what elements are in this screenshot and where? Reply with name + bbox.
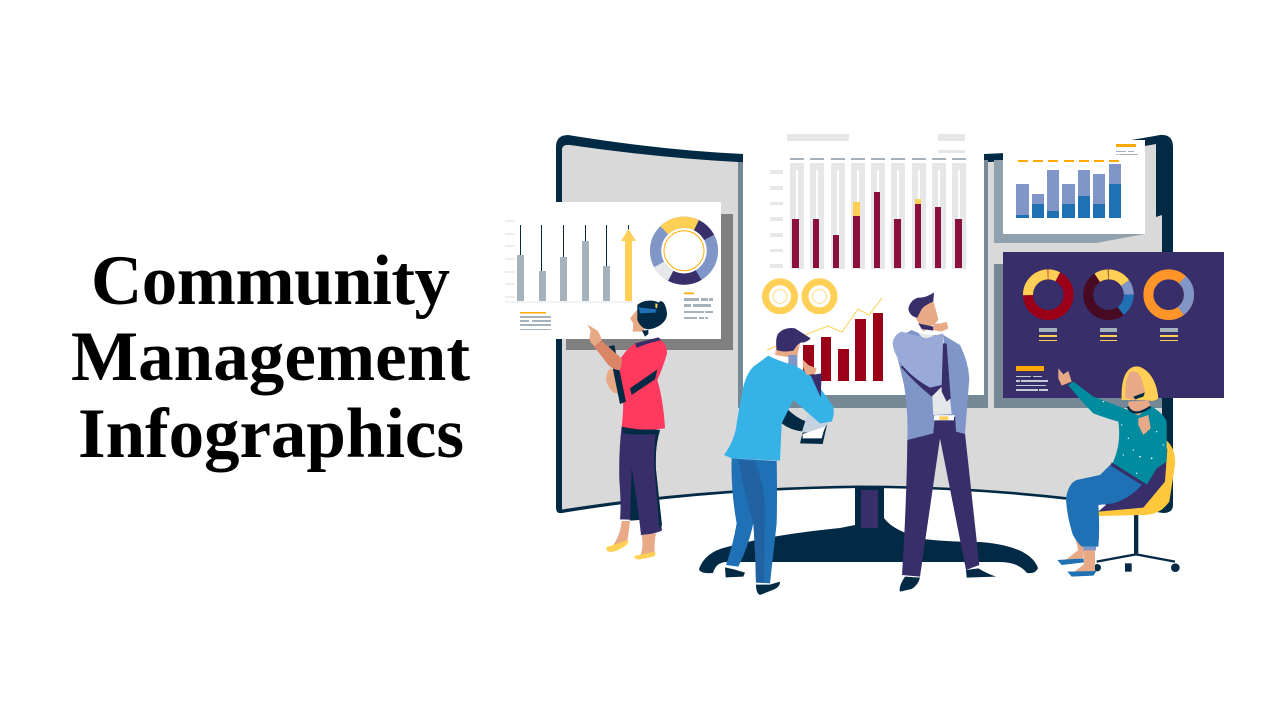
belt	[934, 416, 954, 420]
donut one	[1028, 274, 1069, 315]
centre chart ticks	[770, 170, 783, 268]
pointing arm	[592, 340, 622, 370]
panel: left chart shadow	[566, 214, 733, 350]
clipboard	[782, 408, 828, 444]
sweater	[1068, 382, 1167, 485]
figure: man thinking	[893, 292, 996, 592]
title: Community	[91, 242, 450, 320]
trousers	[726, 458, 777, 583]
neck and hair	[1122, 366, 1158, 401]
figure: man in blue	[724, 328, 834, 595]
donut caption	[684, 292, 713, 319]
centre chart header	[787, 134, 965, 153]
folder	[608, 345, 626, 404]
figure: woman pointing	[587, 301, 667, 560]
shoes	[725, 567, 780, 595]
cuffs	[726, 565, 770, 585]
hand	[803, 359, 817, 375]
head	[916, 302, 938, 332]
monitor frame	[556, 135, 1173, 513]
donut two	[1088, 274, 1129, 315]
monitor stand	[699, 485, 1038, 573]
legs	[612, 521, 656, 556]
hands	[1058, 368, 1151, 435]
panel: centre chart	[743, 130, 984, 395]
head	[630, 309, 644, 332]
figure: seated woman	[1057, 366, 1180, 577]
shoes	[606, 540, 655, 560]
arm	[901, 357, 943, 397]
panel: purple donuts	[1003, 252, 1224, 398]
jacket	[893, 330, 969, 440]
far arm	[606, 368, 622, 394]
trousers	[902, 417, 979, 577]
left chart caption	[520, 312, 551, 330]
yellow ring icons	[766, 282, 834, 311]
column bar chart	[790, 158, 966, 269]
left chart ticks	[505, 220, 515, 298]
panel: left chart	[505, 202, 721, 339]
legs	[1063, 538, 1095, 572]
chart header	[1116, 144, 1138, 155]
panel: centre chart shadow	[738, 160, 988, 408]
chair base	[1094, 515, 1180, 572]
shirt	[918, 333, 952, 415]
top	[619, 338, 667, 430]
panel: right top chart	[1003, 140, 1145, 234]
arrow: growth	[621, 229, 636, 301]
red bar chart with trend line	[767, 298, 883, 381]
donut three	[1148, 274, 1189, 315]
stacked bar chart	[1016, 164, 1121, 218]
panel: right shadow	[994, 160, 1162, 408]
title: Management	[71, 318, 470, 396]
donut chart	[656, 222, 712, 279]
head	[775, 343, 800, 358]
purple panel caption	[1016, 366, 1048, 391]
shoes	[900, 568, 996, 592]
donut captions	[1039, 328, 1178, 341]
title	[71, 242, 470, 473]
left bar chart	[505, 225, 633, 302]
title: Infographics	[78, 395, 464, 473]
sleeve cuff	[811, 373, 822, 397]
jacket	[724, 356, 834, 461]
pants	[619, 427, 662, 535]
dashed orange line	[1018, 160, 1119, 162]
chair seat	[1098, 440, 1175, 516]
